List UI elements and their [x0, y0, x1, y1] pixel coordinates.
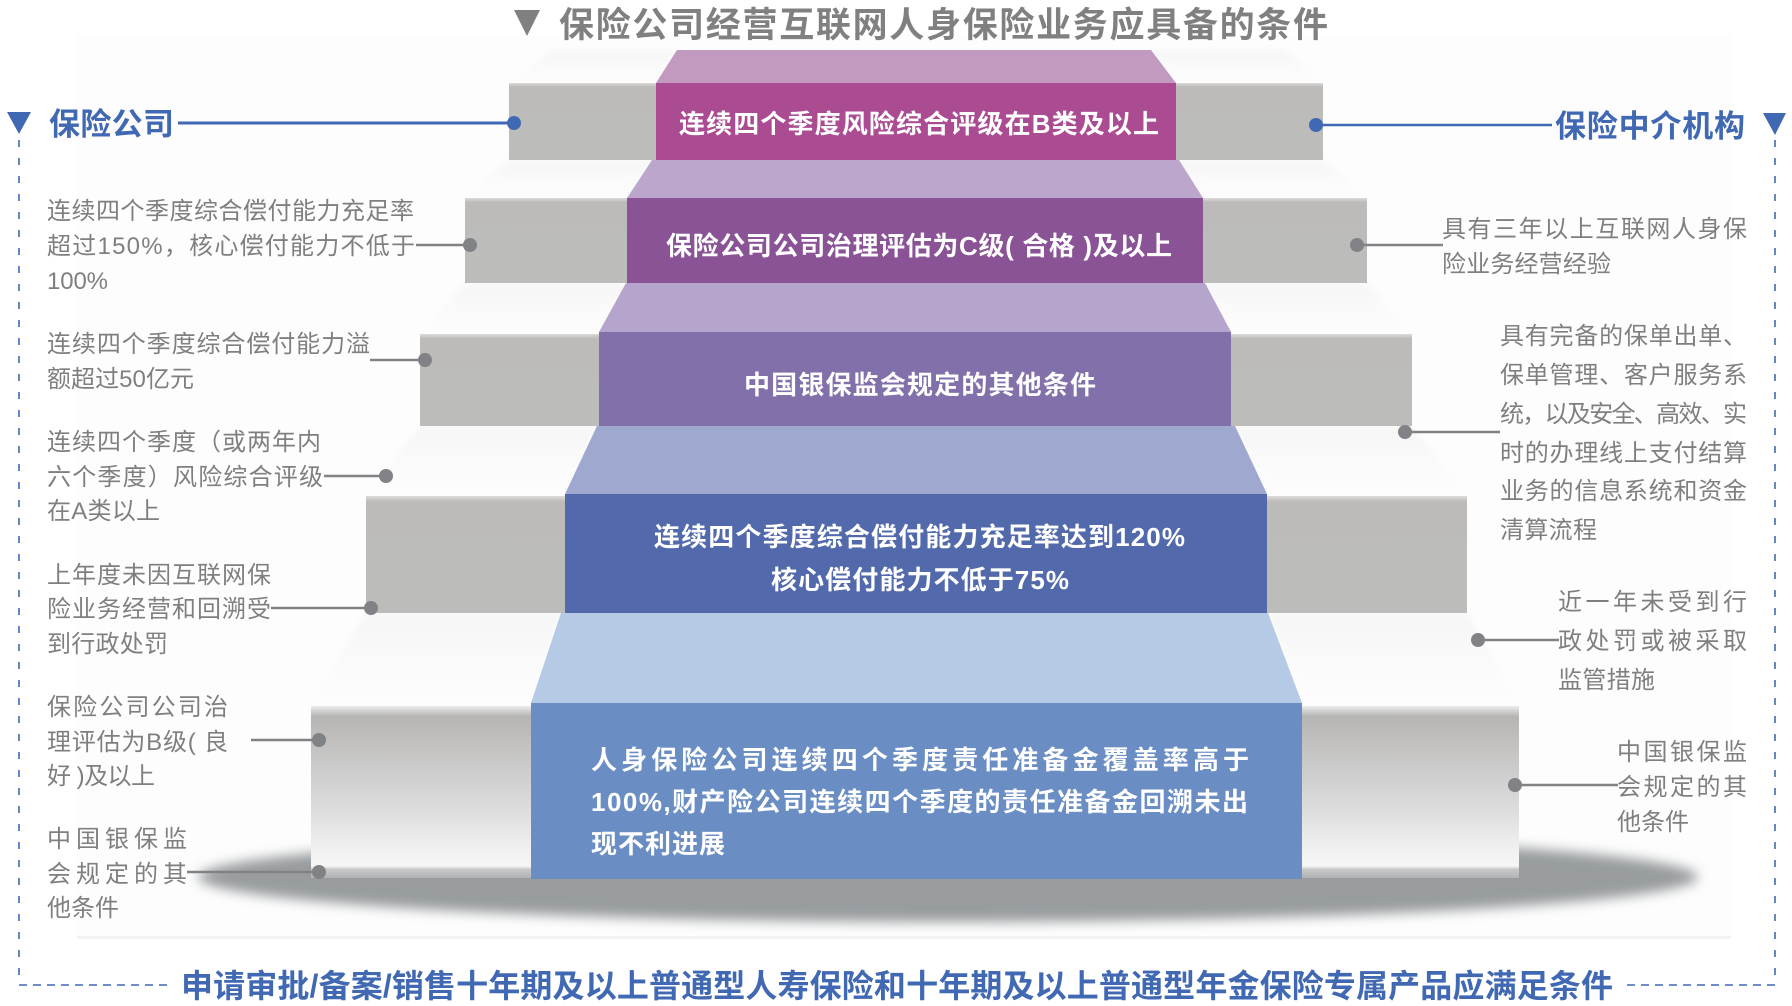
heading: intermediary: 保险中介机构 — [1555, 109, 1745, 144]
right note 2: 保单管理、客户服务系 — [1500, 362, 1747, 389]
right note 2: 统，以及安全、高效、实 — [1500, 401, 1747, 428]
step 5: reserve coverage: 现不利进展 — [591, 829, 725, 859]
right note 1: 具有三年以上互联网人身保 — [1442, 216, 1747, 243]
right note 1 — [1350, 216, 1747, 278]
left note 6: 他条件 — [47, 895, 119, 922]
heading: insurance company: 保险公司 — [49, 107, 174, 142]
icon: left triangle — [7, 112, 31, 134]
left note 5: 好 )及以上 — [47, 763, 155, 790]
step 5: reserve coverage: 人身保险公司连续四个季度责任准备金覆盖率高于 — [591, 745, 1249, 775]
left note 4 — [47, 562, 378, 658]
left note 5: 保险公司公司治 — [47, 694, 228, 721]
right note 3: 近一年未受到行 — [1558, 589, 1747, 616]
step 1: risk rating — [656, 50, 1176, 160]
right note 2: 时的办理线上支付结算 — [1500, 440, 1747, 467]
step 3: other CBIRC conditions: 中国银保监会规定的其他条件 — [744, 370, 1096, 400]
right note 2: 清算流程 — [1500, 517, 1597, 544]
left note 2: 连续四个季度综合偿付能力溢 — [47, 331, 370, 358]
right note 2 — [1398, 323, 1747, 544]
left note 1: 100% — [47, 268, 108, 295]
right note 3: 监管措施 — [1558, 667, 1655, 694]
step 3: other CBIRC conditions — [599, 283, 1231, 426]
left note 1 — [47, 198, 477, 295]
step 5: reserve coverage: 100%,财产险公司连续四个季度的责任准备金回溯未出 — [591, 787, 1248, 817]
left note 2 — [47, 331, 432, 393]
left note 4: 险业务经营和回溯受 — [47, 596, 271, 623]
right note 4: 中国银保监 — [1617, 739, 1747, 766]
step 4: solvency — [565, 426, 1267, 613]
left note 6: 会规定的其 — [47, 861, 187, 888]
step 2: governance assessment — [627, 160, 1203, 283]
left note 2: 额超过50亿元 — [47, 366, 194, 393]
right note 4: 会规定的其 — [1617, 774, 1747, 801]
step 5: reserve coverage — [531, 613, 1302, 879]
ground shadow — [198, 832, 1698, 922]
staircase diagram — [198, 50, 1698, 922]
left note 4: 上年度未因互联网保 — [47, 562, 271, 589]
left note 6: 中国银保监 — [47, 826, 187, 853]
icon: right triangle — [1763, 113, 1786, 135]
left note 1: 连续四个季度综合偿付能力充足率 — [47, 198, 414, 225]
grey step risers — [311, 83, 1519, 878]
right note 1: 险业务经营经验 — [1442, 251, 1611, 278]
right note 4: 他条件 — [1617, 809, 1689, 836]
step side tops — [310, 50, 1519, 703]
right note 3 — [1471, 589, 1747, 694]
right note 2: 业务的信息系统和资金 — [1500, 478, 1747, 505]
step 4: solvency: 连续四个季度综合偿付能力充足率达到120% — [654, 522, 1185, 552]
bottom caption: 申请审批/备案/销售十年期及以上普通型人寿保险和十年期及以上普通型年金保险专属产品应满足条件 — [181, 968, 1613, 1004]
step 2: governance assessment: 保险公司公司治理评估为C级( 合格 )及以上 — [666, 231, 1172, 261]
title: 保险公司经营互联网人身保险业务应具备的条件 — [559, 6, 1328, 45]
left note 4: 到行政处罚 — [47, 631, 168, 658]
right note 3: 政处罚或被采取 — [1558, 628, 1747, 655]
step 4: solvency: 核心偿付能力不低于75% — [771, 565, 1069, 595]
left note 5: 理评估为B级( 良 — [47, 729, 228, 756]
right note 4 — [1508, 739, 1747, 836]
left note 3: 连续四个季度（或两年内 — [47, 429, 321, 456]
left note 1: 超过150%，核心偿付能力不低于 — [47, 233, 415, 260]
step 1: risk rating: 连续四个季度风险综合评级在B类及以上 — [679, 109, 1159, 139]
left note 6 — [47, 826, 326, 922]
right note 2: 具有完备的保单出单、 — [1500, 323, 1747, 350]
heading: insurance company — [7, 107, 521, 142]
left note 3: 六个季度）风险综合评级 — [47, 464, 323, 491]
left note 3 — [47, 429, 393, 525]
left note 5 — [47, 694, 326, 790]
icon: title triangle — [514, 10, 540, 36]
heading: intermediary — [1309, 109, 1786, 144]
left note 3: 在A类以上 — [47, 498, 160, 525]
